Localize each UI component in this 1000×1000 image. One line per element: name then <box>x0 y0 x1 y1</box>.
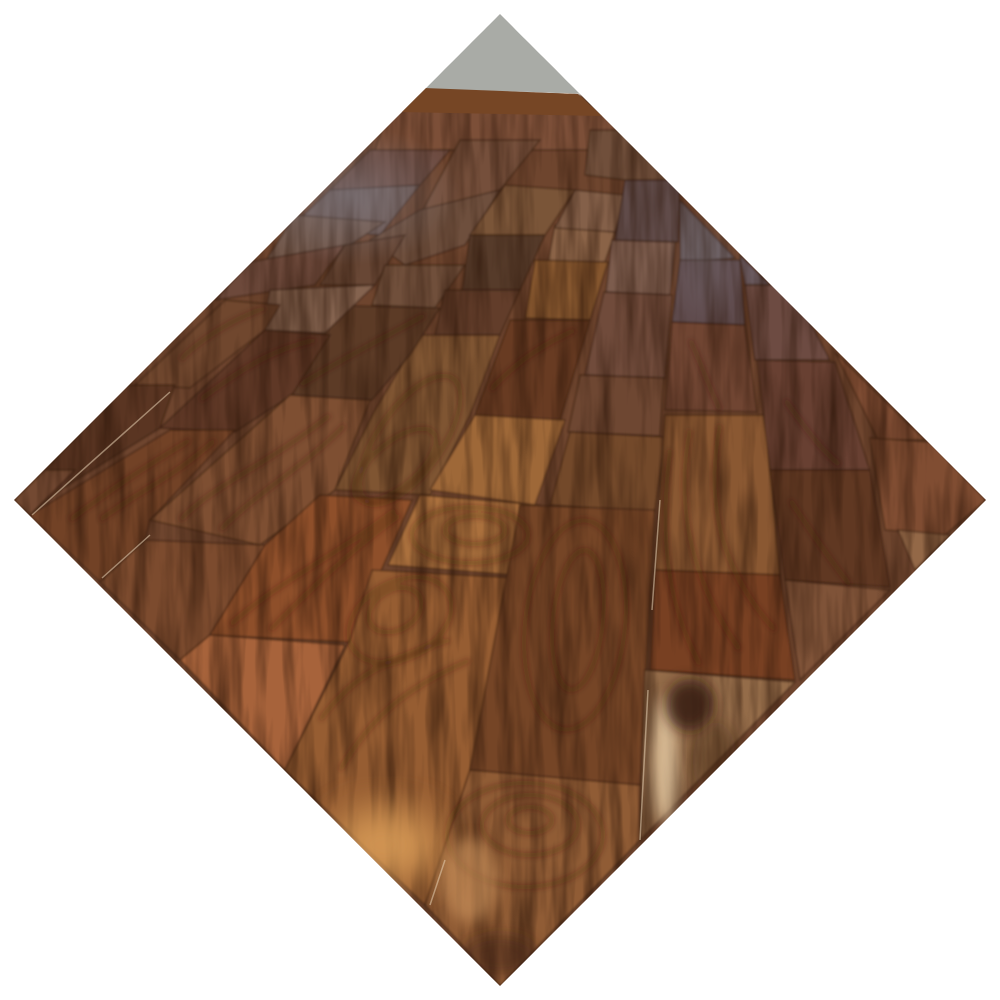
knots and swirls in the grain <box>70 308 850 887</box>
plank edge highlights <box>32 392 660 905</box>
lighting: warm sun patch at the bottom <box>330 679 737 975</box>
lighting: cool sheen at the far left of the floor <box>281 139 733 303</box>
baseboard <box>400 88 602 116</box>
wall <box>400 14 600 114</box>
